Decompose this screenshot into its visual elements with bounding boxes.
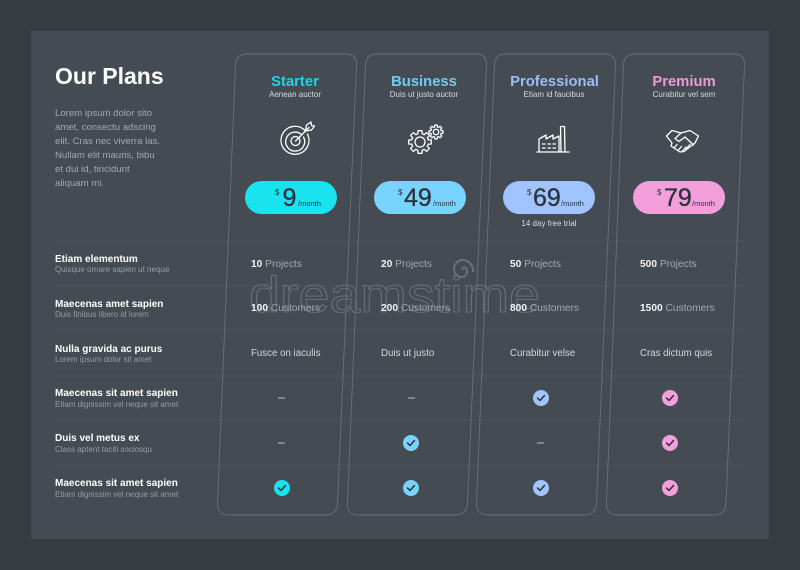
intro text block: elit. Cras nec viverra las. bbox=[55, 136, 160, 147]
plan values bbox=[640, 259, 715, 496]
price pill: 79 bbox=[664, 184, 692, 212]
trial note: 14 day free trial bbox=[521, 219, 577, 228]
panel: Business plan: Duis ut justo auctor bbox=[390, 90, 459, 99]
price pill bbox=[374, 181, 466, 214]
panel: Business plan bbox=[347, 54, 486, 515]
plan values: 800 Customers bbox=[510, 303, 579, 314]
price pill: /month bbox=[433, 199, 456, 208]
icon: gears bbox=[409, 125, 443, 153]
panel: Starter plan: Aenean auctor bbox=[269, 90, 321, 99]
feature labels column: Quisque ornare sapien ut neque bbox=[55, 265, 170, 274]
plan values: Duis ut justo bbox=[381, 348, 434, 359]
plan values: 500 Projects bbox=[640, 259, 697, 270]
icon: handshake bbox=[666, 130, 698, 152]
intro text block: Lorem ipsum dolor sito bbox=[55, 108, 152, 119]
intro text block: Nullam elit mauris, bibu bbox=[55, 150, 155, 161]
panel: Premium plan: Curabitur vel sem bbox=[653, 90, 716, 99]
intro text block: amet, consectu adscing bbox=[55, 122, 156, 133]
plan values: 50 Projects bbox=[510, 259, 561, 270]
feature labels column: Nulla gravida ac purus bbox=[55, 344, 163, 355]
price pill: $ bbox=[527, 188, 532, 197]
plan values: 20 Projects bbox=[381, 259, 432, 270]
panel: Professional plan bbox=[476, 54, 616, 515]
feature labels column: Maecenas amet sapien bbox=[55, 299, 163, 310]
plan values: 1500 Customers bbox=[640, 303, 715, 314]
feature labels column: Lorem ipsum dolor sit amet bbox=[55, 355, 152, 364]
price pill: 49 bbox=[404, 184, 432, 212]
intro text block: aliquam mi. bbox=[55, 178, 104, 189]
price pill: $ bbox=[398, 188, 403, 197]
price pill bbox=[503, 181, 595, 214]
watermark: dreamstime bbox=[249, 267, 540, 323]
price pill: 9 bbox=[282, 184, 296, 212]
feature labels column: Duis finibus libero id lorem bbox=[55, 310, 149, 319]
feature labels column: Maecenas sit amet sapien bbox=[55, 478, 178, 489]
price pill: /month bbox=[561, 199, 584, 208]
panel: Starter plan bbox=[217, 54, 356, 515]
feature labels column: Etiam dignissim vel neque sit amet bbox=[55, 400, 179, 409]
feature labels column: Maecenas sit amet sapien bbox=[55, 388, 178, 399]
icon: target bbox=[281, 122, 314, 154]
price pill: /month bbox=[692, 199, 715, 208]
plan values: Fusce on iaculis bbox=[251, 348, 321, 359]
plan values: 200 Customers bbox=[381, 303, 450, 314]
price pill: $ bbox=[657, 188, 662, 197]
plan values bbox=[381, 259, 450, 496]
feature labels column: Duis vel metus ex bbox=[55, 433, 140, 444]
icon: factory bbox=[537, 126, 569, 152]
panel: Premium plan bbox=[606, 54, 744, 515]
panel: Professional plan: Professional bbox=[510, 74, 599, 90]
feature labels column: Etiam dignissim vel neque sit amet bbox=[55, 490, 179, 499]
panel: Starter plan: Starter bbox=[271, 74, 319, 90]
panel: Business plan: Business bbox=[391, 74, 457, 90]
price pill: $ bbox=[275, 188, 280, 197]
plan values: Curabitur velse bbox=[510, 348, 575, 359]
plan values: Cras dictum quis bbox=[640, 348, 712, 359]
price pill: /month bbox=[298, 199, 321, 208]
feature labels column: Etiam elementum bbox=[55, 254, 138, 265]
plan values bbox=[251, 259, 321, 496]
panel: Professional plan: Etiam id faucibus bbox=[524, 90, 584, 99]
plan values: 100 Customers bbox=[251, 303, 320, 314]
intro text block: et dui id, tincidunt bbox=[55, 164, 130, 175]
price pill bbox=[633, 181, 725, 214]
price pill bbox=[245, 181, 337, 214]
feature labels column: Class aptent taciti sociosqu bbox=[55, 445, 152, 454]
panel: Premium plan: Premium bbox=[652, 74, 716, 90]
feature labels column bbox=[55, 254, 179, 499]
plan values bbox=[510, 259, 579, 496]
plan values: 10 Projects bbox=[251, 259, 302, 270]
title: Our Plans bbox=[55, 63, 164, 89]
price pill: 69 bbox=[533, 184, 561, 212]
